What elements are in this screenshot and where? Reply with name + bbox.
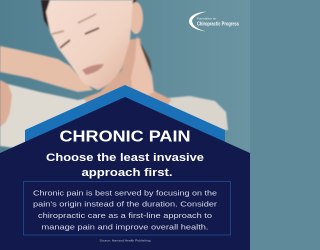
neck and chest	[84, 38, 172, 120]
body text box: manage pain and improve overall health.	[42, 222, 208, 232]
subtitle	[46, 152, 204, 179]
body text box: Chronic pain is best served by focusing on the	[33, 188, 217, 198]
title: CHRONIC PAIN	[60, 128, 190, 146]
blue roof	[25, 85, 225, 145]
body text box	[24, 182, 230, 235]
shirt left	[0, 84, 90, 150]
logo small line: Foundation for	[197, 16, 216, 20]
logo: Foundation for Chiropractic Progress	[189, 12, 239, 32]
infographic canvas	[0, 0, 250, 250]
subtitle: Choose the least invasive	[46, 152, 204, 164]
house panel	[0, 85, 250, 250]
subtitle: approach first.	[82, 167, 172, 179]
shirt right	[168, 96, 228, 130]
hair	[41, 0, 138, 30]
upper arm	[0, 80, 12, 127]
logo arc	[189, 12, 207, 32]
forearm	[0, 46, 93, 92]
source: Source: Harvard Health Publishing	[100, 238, 151, 242]
lips	[82, 64, 104, 75]
photo: woman holding her neck	[0, 0, 228, 150]
eyes	[60, 40, 70, 48]
logo name: Chiropractic Progress	[197, 22, 239, 28]
body text box: chiropractic care as a first-line approach to	[38, 211, 212, 220]
navy house body	[0, 97, 250, 250]
hand on neck	[131, 36, 154, 96]
body text box: pain's origin instead of the duration. Consider	[33, 200, 218, 208]
background	[0, 0, 250, 250]
ear	[129, 2, 143, 34]
face	[46, 0, 133, 90]
